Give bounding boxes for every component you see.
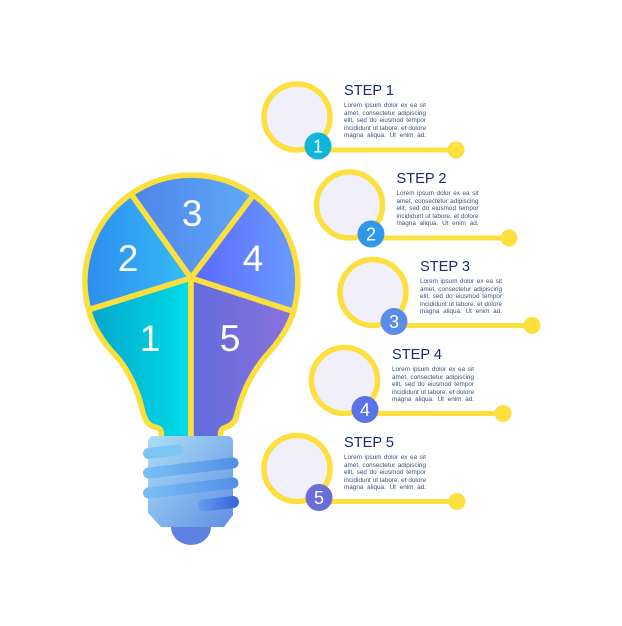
- bulb base cap: [171, 526, 211, 545]
- step 3 text: magna aliqua. Ut enim ad.: [420, 308, 502, 315]
- step 4 text: Lorem ipsum dolor ex ea sit: [392, 366, 474, 373]
- step 2 marker: 2: [366, 224, 376, 244]
- step 5 text: [344, 434, 426, 491]
- step 3 text: Lorem ipsum dolor ex ea sit: [420, 278, 502, 285]
- step 2 text: incididunt ut labore. et dolore: [396, 213, 478, 220]
- step 1 marker: [264, 84, 464, 160]
- segment 2: [85, 194, 191, 310]
- step 4 text: elit, sed do eiusmod tempor: [392, 381, 474, 388]
- step 2 text: magna aliqua. Ut enim ad.: [396, 220, 478, 227]
- step 1 text: incididunt ut labore. et dolore: [344, 125, 426, 132]
- step 4 marker: 4: [360, 400, 370, 420]
- step 4 text: [392, 346, 474, 403]
- segment numbers: 1: [140, 318, 160, 359]
- step 5 marker: [264, 436, 466, 511]
- step 4 text: STEP 4: [392, 346, 442, 362]
- step 1 marker: 1: [313, 136, 323, 156]
- step 2 text: amet, consectetur adipiscing: [396, 198, 478, 205]
- step 3 text: elit, sed do eiusmod tempor: [420, 293, 502, 300]
- bulb segments: [85, 175, 298, 445]
- step 1 text: magna aliqua. Ut enim ad.: [344, 132, 426, 139]
- step 2 text: STEP 2: [396, 170, 447, 186]
- segment numbers: 4: [243, 238, 263, 279]
- step 4 text: magna aliqua. Ut enim ad.: [392, 396, 474, 403]
- step 3 text: [420, 258, 502, 315]
- step 3 text: amet, consectetur adipiscing: [420, 286, 502, 293]
- step 5 text: Lorem ipsum dolor ex ea sit: [344, 454, 426, 461]
- step 3 text: STEP 3: [420, 258, 470, 274]
- segment numbers: 5: [220, 318, 240, 359]
- step 1 text: amet, consectetur adipiscing: [344, 110, 426, 117]
- segment 5: [191, 278, 294, 445]
- segment numbers: 2: [118, 238, 138, 279]
- step 2 text: elit, sed do eiusmod tempor: [396, 205, 478, 212]
- step 4 text: amet, consectetur adipiscing: [392, 374, 474, 381]
- step 3 text: incididunt ut labore. et dolore: [420, 301, 502, 308]
- step 5 marker: 5: [314, 488, 324, 508]
- segment 4: [191, 195, 298, 311]
- segment 3: [131, 175, 254, 278]
- segment 1: [89, 278, 191, 445]
- step 5 text: magna aliqua. Ut enim ad.: [344, 484, 426, 491]
- step 4 text: incididunt ut labore. et dolore: [392, 389, 474, 396]
- step 4 marker: [312, 348, 512, 423]
- step 5 text: amet, consectetur adipiscing: [344, 462, 426, 469]
- step 2 text: [396, 170, 478, 227]
- step 5 text: elit, sed do eiusmod tempor: [344, 469, 426, 476]
- segment numbers: 3: [182, 193, 202, 234]
- step 2 text: Lorem ipsum dolor ex ea sit: [396, 190, 478, 197]
- bulb screw base: [148, 436, 233, 527]
- step 5 text: STEP 5: [344, 434, 394, 450]
- step 3 marker: 3: [389, 312, 399, 332]
- step 1 text: Lorem ipsum dolor ex ea sit: [344, 102, 426, 109]
- step 1 text: elit, sed do eiusmod tempor: [344, 117, 426, 124]
- segment numbers: [118, 193, 263, 359]
- step 1 text: [344, 82, 426, 139]
- step 2 marker: [316, 172, 518, 248]
- step 5 text: incididunt ut labore. et dolore: [344, 477, 426, 484]
- step 3 marker: [340, 260, 540, 335]
- step 1 text: STEP 1: [344, 82, 394, 98]
